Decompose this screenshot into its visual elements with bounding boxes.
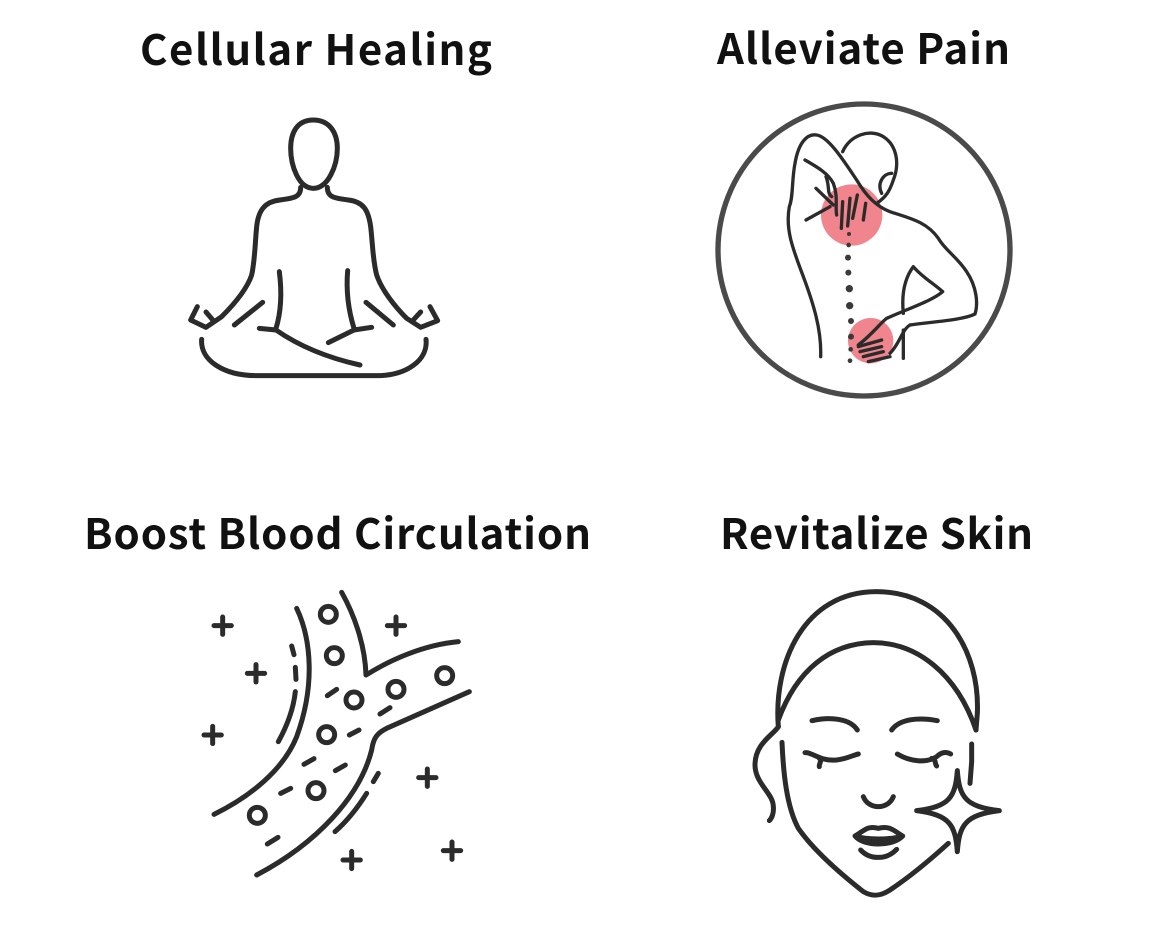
- panel: alleviate pain: [716, 16, 1010, 396]
- icon: back pain in circle: [718, 104, 1010, 396]
- heading: cellular healing: Cellular Healing: [140, 17, 492, 78]
- panel: cellular healing: [140, 17, 492, 376]
- icon: face with sparkle: [755, 592, 999, 895]
- panel: revitalize skin: [720, 501, 1033, 895]
- heading: boost blood circulation: Boost Blood Circulation: [84, 501, 591, 562]
- icon: blood vessel: [204, 592, 469, 875]
- heading: alleviate pain: Alleviate Pain: [716, 16, 1010, 77]
- panel: boost blood circulation: [84, 501, 591, 875]
- icon: meditating person: [191, 120, 438, 376]
- heading: revitalize skin: Revitalize Skin: [720, 501, 1033, 562]
